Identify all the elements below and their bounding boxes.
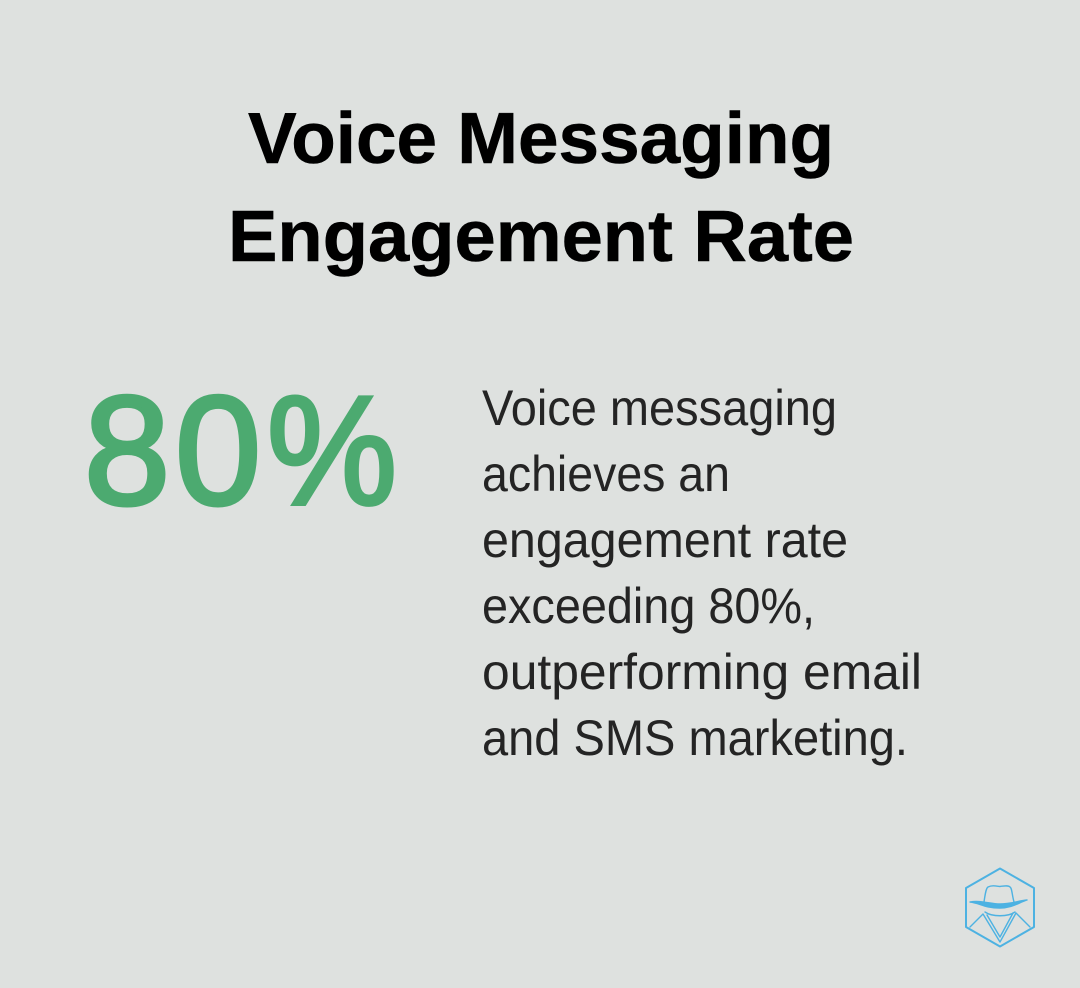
statistic: 80%: 8 bbox=[84, 364, 170, 537]
description text: achieves an bbox=[482, 446, 730, 502]
icon: hexagon spy logo bbox=[966, 868, 1034, 946]
title: Voice Messaging bbox=[248, 99, 834, 179]
statistic: 80%: % bbox=[267, 364, 397, 537]
description text: exceeding 80%, bbox=[482, 578, 815, 634]
statistic: 80% bbox=[84, 364, 397, 537]
description text bbox=[482, 380, 922, 766]
description text: and SMS marketing. bbox=[482, 710, 908, 766]
description text: engagement rate bbox=[482, 512, 848, 568]
title bbox=[228, 99, 854, 277]
title: Engagement Rate bbox=[228, 197, 854, 277]
statistic: 80%: 0 bbox=[175, 364, 261, 537]
description text: Voice messaging bbox=[482, 380, 837, 436]
description text: outperforming email bbox=[482, 644, 922, 700]
